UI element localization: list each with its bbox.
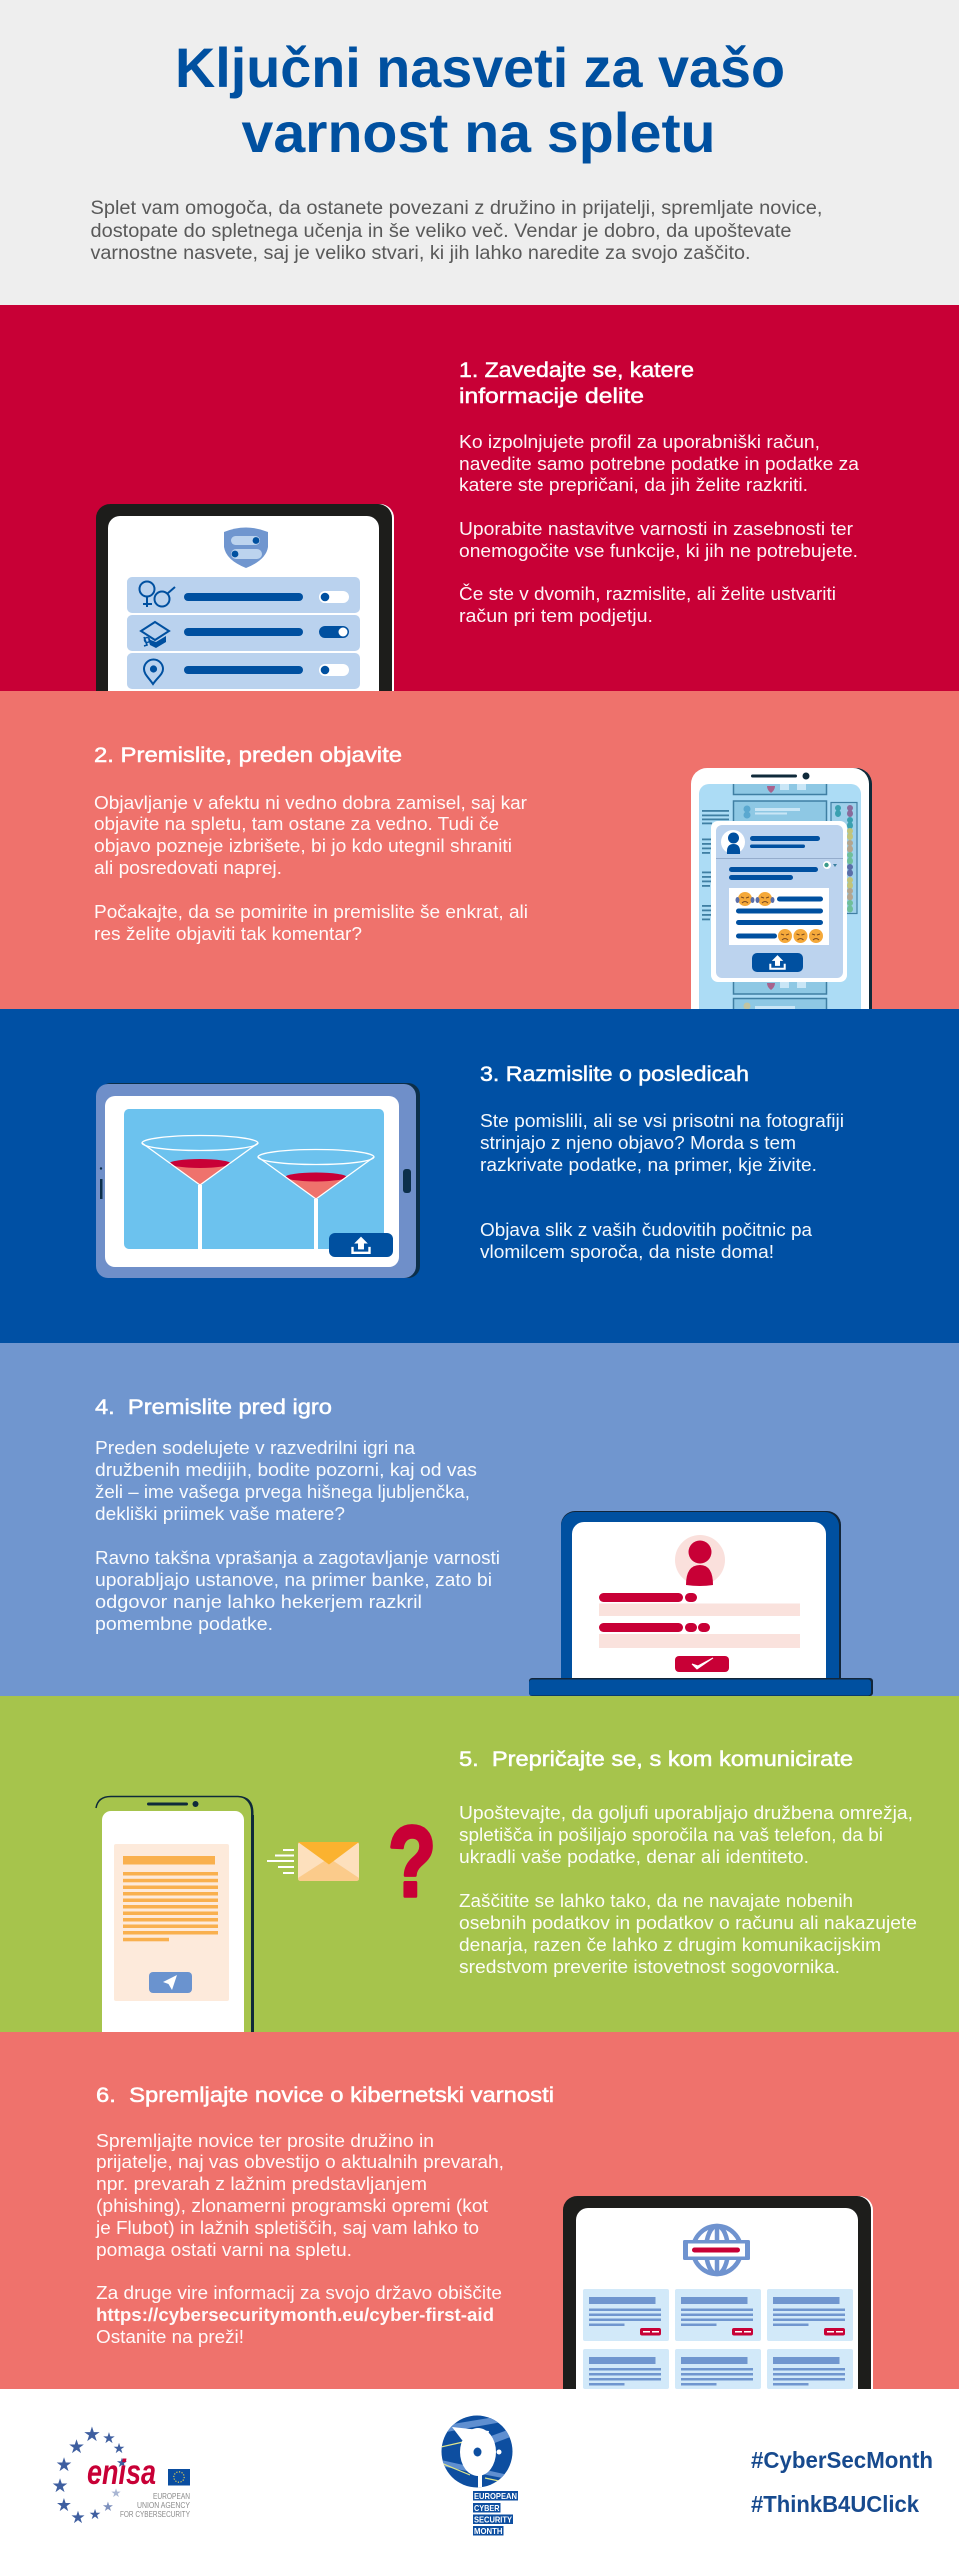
text 3: [480, 1111, 844, 1262]
hashtags: #ThinkB4UClick: [751, 2491, 919, 2517]
text 4: [95, 1438, 500, 1634]
icon: ring of stars: ★: [83, 2424, 101, 2446]
text 2: Objavljanje v afektu ni vedno dobra zamisel, saj kar: [94, 793, 527, 813]
agency name: FOR CYBERSECURITY: [120, 2509, 190, 2519]
setting row: gender: [127, 577, 360, 613]
post popup: [711, 821, 847, 982]
illustration: laptop with login form: [529, 1511, 873, 1696]
news cards: [583, 2289, 853, 2389]
heading 5: 5. Prepričajte se, s kom komunicirate: [459, 1748, 853, 1771]
title: Ključni nasveti za vašo: [175, 36, 785, 99]
text 6: https://cybersecuritymonth.eu/cyber-first-aid: [96, 2305, 494, 2325]
upload button: [752, 953, 803, 972]
feed posts: [734, 784, 826, 1010]
hashtags: #CyberSecMonth: [751, 2447, 933, 2473]
glass 1: [142, 1136, 258, 1249]
text 1: onemogočite vse funkcije, ki jih ne potrebujete.: [459, 541, 858, 561]
glass 2: [258, 1150, 374, 1249]
text 6: je Flubot) in lažnih spletiščih, saj vam lahko to: [95, 2218, 479, 2238]
comment box with emojis: [729, 888, 829, 945]
text 5: osebnih podatkov in podatkov o računu ali nakazujete: [459, 1913, 917, 1933]
logo: European Cyber Security Month: [441, 2414, 518, 2536]
icon: ring of stars: ★: [55, 2455, 73, 2476]
text 1: navedite samo potrebne podatke in podatke za: [459, 454, 860, 474]
hashtags: [751, 2447, 933, 2517]
text 2: [94, 793, 528, 944]
text 4: želi – ime vašega prvega hišnega ljubljenčka,: [95, 1482, 470, 1502]
send button: [149, 1972, 192, 1993]
icon: globe: [683, 2226, 750, 2274]
icon: shield: [224, 528, 268, 568]
text 6: Spremljajte novice ter prosite družino in: [96, 2131, 434, 2151]
text 3: strinjajo z njeno objavo? Morda s tem: [480, 1133, 796, 1153]
text 3: razkrivate podatke, na primer, kje živite.: [480, 1155, 817, 1175]
illustration: phone with angry post: [691, 768, 872, 1010]
text 4: Preden sodelujete v razvedrilni igri na: [95, 1438, 416, 1458]
text 5: spletišča in pošiljajo sporočila na vaš telefon, da bi: [459, 1825, 883, 1845]
friends column: [831, 802, 857, 914]
text 3: Objava slik z vaših čudovitih počitnic pa: [480, 1220, 813, 1240]
text 5: ukradli vaše podatke, denar ali identiteto.: [459, 1847, 809, 1867]
text 2: objavo pozneje izbrišete, bi jo kdo utegnil shraniti: [94, 836, 512, 856]
text 6: npr. prevarah z lažnim predstavljanjem: [96, 2174, 427, 2194]
confirm button: [675, 1656, 729, 1672]
panel: tip 1: [0, 305, 959, 691]
text 4: dekliški priimek vaše matere?: [95, 1504, 345, 1524]
icon: ring of stars: [51, 2424, 128, 2527]
text 6: (phishing), zlonamerni programski opremi (kot: [96, 2196, 488, 2216]
heading 2: 2. Premislite, preden objavite: [94, 744, 402, 767]
heading 1: [459, 359, 694, 408]
illustration: phone with message: [96, 1796, 254, 2032]
heading 3: 3. Razmislite o posledicah: [480, 1063, 749, 1086]
icon: ring of stars: ★: [68, 2437, 85, 2458]
text 5: sredstvom preverite istovetnost sogovornika.: [459, 1957, 840, 1977]
text 4: odgovor nanje lahko hekerjem razkril: [95, 1592, 422, 1612]
panel: header: [0, 0, 959, 305]
icon: ring of stars: ★: [51, 2476, 69, 2497]
menu lines: [702, 810, 729, 920]
text 1: katere ste prepričani, da jih želite razkriti.: [459, 475, 808, 495]
text 5: Upoštevajte, da goljufi uporabljajo družbena omrežja,: [459, 1803, 913, 1823]
title: [175, 36, 785, 164]
text 5: denarja, razen če lahko z drugim komunikacijskim: [459, 1935, 881, 1955]
setting row: education: [127, 615, 360, 651]
panel: tip 4: [0, 1343, 959, 1696]
logo: ENISA: [51, 2424, 190, 2527]
text 4: pomembne podatke.: [95, 1614, 273, 1634]
logo text: CYBER: [474, 2503, 500, 2513]
wordmark: enisa: [87, 2453, 156, 2492]
icon: ring of stars: ★: [111, 2486, 121, 2500]
form fields: [599, 1593, 800, 1648]
setting row: location: [127, 653, 360, 689]
heading 6: 6. Spremljajte novice o kibernetski varnosti: [96, 2084, 554, 2107]
logo text: MONTH: [474, 2526, 502, 2536]
title: varnost na spletu: [242, 101, 716, 164]
text 3: Ste pomislili, ali se vsi prisotni na fotografiji: [480, 1111, 844, 1131]
intro text: varnostne nasvete, saj je veliko stvari, ki jih lahko naredite za svojo zaščito.: [90, 243, 750, 264]
text 2: Počakajte, da se pomirite in premislite še enkrat, ali: [94, 902, 528, 922]
panel: tip 5: [0, 1696, 959, 2032]
icon: keyhole oval: [441, 2414, 513, 2490]
logo text: EUROPEAN: [474, 2491, 517, 2501]
text 1: Uporabite nastavitve varnosti in zasebnosti ter: [459, 519, 853, 539]
icon: ring of stars: ★: [70, 2508, 86, 2527]
intro text: Splet vam omogoča, da ostanete povezani z družino in prijatelji, spremljate novice,: [90, 198, 822, 219]
heading 1: informacije delite: [459, 385, 644, 408]
text 5: Zaščitite se lahko tako, da ne navajate nobenih: [459, 1891, 853, 1911]
text 5: [459, 1803, 917, 1977]
icon: flying envelope: [267, 1842, 359, 1881]
text 2: ali posredovati naprej.: [94, 858, 282, 878]
text 6: Za druge vire informacij za svojo državo obiščite: [96, 2283, 502, 2303]
logo text: SECURITY: [474, 2514, 512, 2524]
agency name: UNION AGENCY: [137, 2500, 190, 2510]
icon: ring of stars: ★: [56, 2495, 72, 2515]
panel: footer: [52, 2416, 932, 2536]
icon: ring of stars: ★: [102, 2430, 116, 2447]
panel: tip 2: [0, 691, 959, 1010]
text 6: prijatelje, naj vas obvestijo o aktualnih prevarah,: [96, 2152, 504, 2172]
agency name: EUROPEAN: [153, 2491, 190, 2501]
upload button: [329, 1233, 393, 1257]
icon: ring of stars: ★: [113, 2440, 125, 2456]
text 1: [459, 432, 860, 626]
text 4: družbenih medijih, bodite pozorni, kaj od vas: [95, 1460, 477, 1480]
illustration: tablet with privacy settings: [96, 504, 394, 691]
panel: tip 3: [0, 1009, 959, 1343]
text 1: račun pri tem podjetju.: [459, 606, 653, 626]
icon: ring of stars: ★: [89, 2506, 101, 2522]
logo text: [473, 2491, 518, 2536]
text 1: Če ste v dvomih, razmislite, ali želite ustvariti: [459, 583, 836, 604]
text 3: vlomilcem sporoča, da niste doma!: [480, 1242, 774, 1262]
text 2: res želite objaviti tak komentar?: [94, 924, 362, 944]
intro text: dostopate do spletnega učenja in še veliko več. Vendar je dobro, da upoštevate: [90, 221, 792, 242]
text 4: Ravno takšna vprašanja a zagotavljanje varnosti: [95, 1548, 500, 1568]
text 6: [95, 2131, 504, 2347]
text 4: uporabljajo ustanove, na primer banke, zato bi: [95, 1570, 492, 1590]
icon: EU flag: [168, 2469, 190, 2486]
icon: question mark: ?: [388, 1806, 436, 1918]
illustration: tablet with news site: [563, 2196, 873, 2389]
text 2: objavite na spletu, tam ostane za vedno. Tudi če: [94, 814, 499, 834]
text 6: pomaga ostati varni na spletu.: [96, 2240, 352, 2260]
icon: ring of stars: ★: [102, 2499, 114, 2514]
text 6: Ostanite na preži!: [96, 2327, 244, 2347]
text 1: Ko izpolnjujete profil za uporabniški račun,: [459, 432, 820, 452]
icon: ring of stars: ★: [116, 2455, 128, 2470]
agency name: [120, 2491, 190, 2519]
avatar: [721, 830, 745, 854]
illustration: tablet with cocktail glasses: [96, 1083, 420, 1278]
avatar: [675, 1535, 725, 1586]
panel: tip 6: [0, 2032, 959, 2389]
heading 4: 4. Premislite pred igro: [95, 1396, 332, 1419]
heading 1: 1. Zavedajte se, katere: [459, 359, 694, 382]
intro text: [90, 198, 822, 264]
